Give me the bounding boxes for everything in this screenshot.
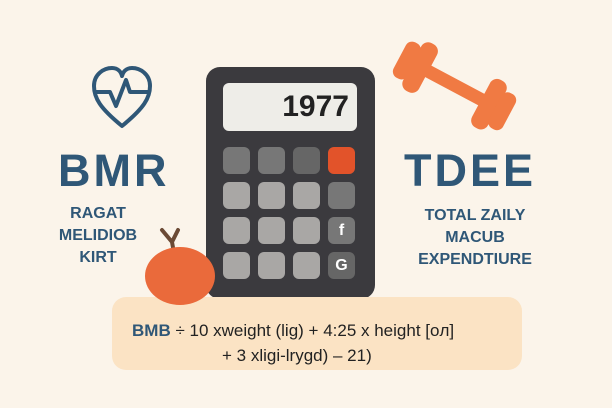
heading: BMR: BMR bbox=[58, 145, 169, 196]
calculator buttons: G bbox=[335, 257, 348, 274]
text: TDEE subtitle: TOTAL ZAILY bbox=[425, 207, 525, 224]
text: TDEE subtitle: EXPENDTIURE bbox=[418, 251, 532, 268]
calculator display: 1977 bbox=[282, 90, 349, 123]
calculator buttons bbox=[223, 147, 355, 279]
text: TDEE subtitle: MACUB bbox=[445, 229, 505, 246]
text: BMR subtitle: RAGAT bbox=[70, 205, 126, 222]
text: BMR subtitle: KIRT bbox=[79, 249, 117, 266]
text: TDEE subtitle bbox=[418, 207, 532, 268]
icon: dumbbell bbox=[392, 42, 516, 130]
calculator bbox=[206, 67, 375, 299]
icon: heart bbox=[92, 66, 152, 128]
calculator display bbox=[223, 83, 357, 131]
text: BMR subtitle bbox=[59, 205, 137, 266]
calculator buttons: f bbox=[339, 222, 344, 239]
icon: apple bbox=[145, 228, 215, 305]
formula text: + 3 xligi-lrygd) – 21) bbox=[222, 346, 372, 365]
formula box bbox=[112, 297, 522, 370]
formula text: BMB ÷ 10 xweight (lig) + 4:25 x height [oл] bbox=[132, 321, 454, 340]
heading: TDEE: TDEE bbox=[404, 145, 536, 196]
text: BMR subtitle: MELIDIOB bbox=[59, 227, 137, 244]
formula text bbox=[132, 321, 454, 365]
